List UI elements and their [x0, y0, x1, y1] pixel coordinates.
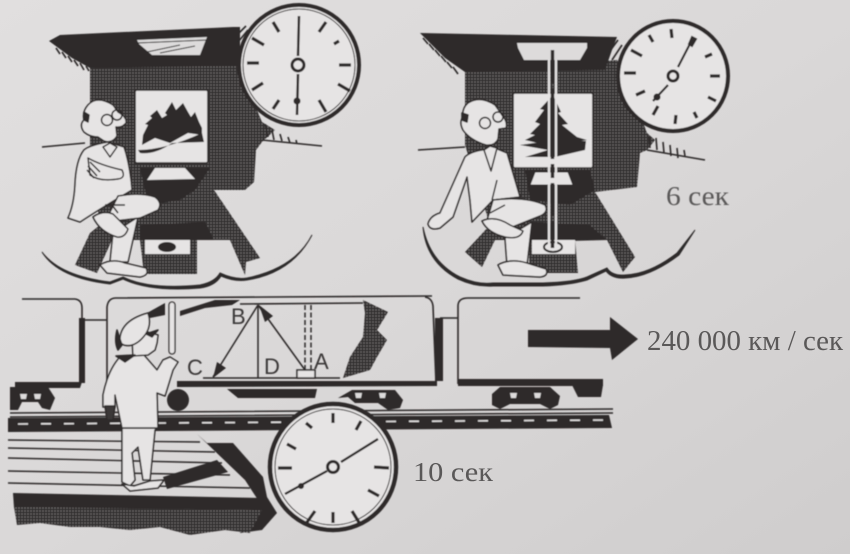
wheel truck light spots [20, 393, 541, 399]
light beam travelling vertically [549, 60, 556, 245]
floor lamp patch [145, 240, 190, 254]
platform lines [8, 440, 250, 488]
car floors [15, 379, 603, 388]
dark shadow areas below window [140, 168, 214, 240]
roof hatching and horizon line [42, 26, 322, 147]
lamp scratches [137, 40, 207, 53]
arrowheads of light path [213, 305, 273, 378]
ceiling lamp [517, 43, 587, 60]
seated man with crossed arms [68, 100, 160, 277]
smoke strip on car roof [147, 300, 240, 318]
compartment wall silhouette [75, 55, 275, 275]
roof hatching and horizon line [418, 38, 705, 160]
window with landscape [135, 90, 208, 163]
clock: 10 seconds on platform [270, 404, 396, 530]
compartment wall silhouette [465, 60, 655, 273]
dark shadow areas below window [525, 170, 607, 242]
panel: observer in moving compartment, right [418, 33, 705, 286]
clock: 0 seconds [239, 5, 359, 125]
light patch on table [530, 172, 573, 185]
point labels: A [314, 349, 329, 374]
label: speed: 240 000 км / сек [647, 326, 843, 357]
mirror A base [297, 370, 315, 378]
compartment roof [49, 27, 240, 68]
point labels: B [231, 304, 246, 329]
ceiling lamp [137, 37, 207, 55]
direction arrow [528, 317, 638, 360]
torn wall edge [343, 300, 388, 378]
panel: train with platform observer [8, 296, 613, 535]
clock: 6 seconds on board [618, 21, 728, 131]
floor lamp patch [532, 240, 575, 254]
compartment roof [420, 33, 617, 72]
car couplers [79, 318, 443, 383]
point labels: D [264, 354, 280, 379]
signal stick [169, 302, 175, 354]
label: 10 seconds: 10 сек [413, 457, 494, 487]
shadow of observer [163, 460, 228, 489]
panel: observer in moving compartment, left [42, 26, 322, 289]
platform edge [13, 493, 263, 510]
point labels: C [187, 355, 203, 380]
window with pine tree [513, 93, 593, 168]
floor curve [423, 227, 695, 286]
label: 6 seconds: 6 сек [666, 181, 730, 211]
train wheels [10, 387, 560, 411]
floor curve [42, 235, 312, 289]
rail track [8, 409, 613, 432]
light path triangle [203, 305, 340, 378]
train cars outline [22, 296, 580, 384]
point labels [187, 304, 329, 380]
light patch on table [147, 168, 195, 180]
platform pole shadow [197, 434, 277, 533]
seated man smiling [428, 99, 547, 277]
platform observer with cap [103, 313, 178, 491]
